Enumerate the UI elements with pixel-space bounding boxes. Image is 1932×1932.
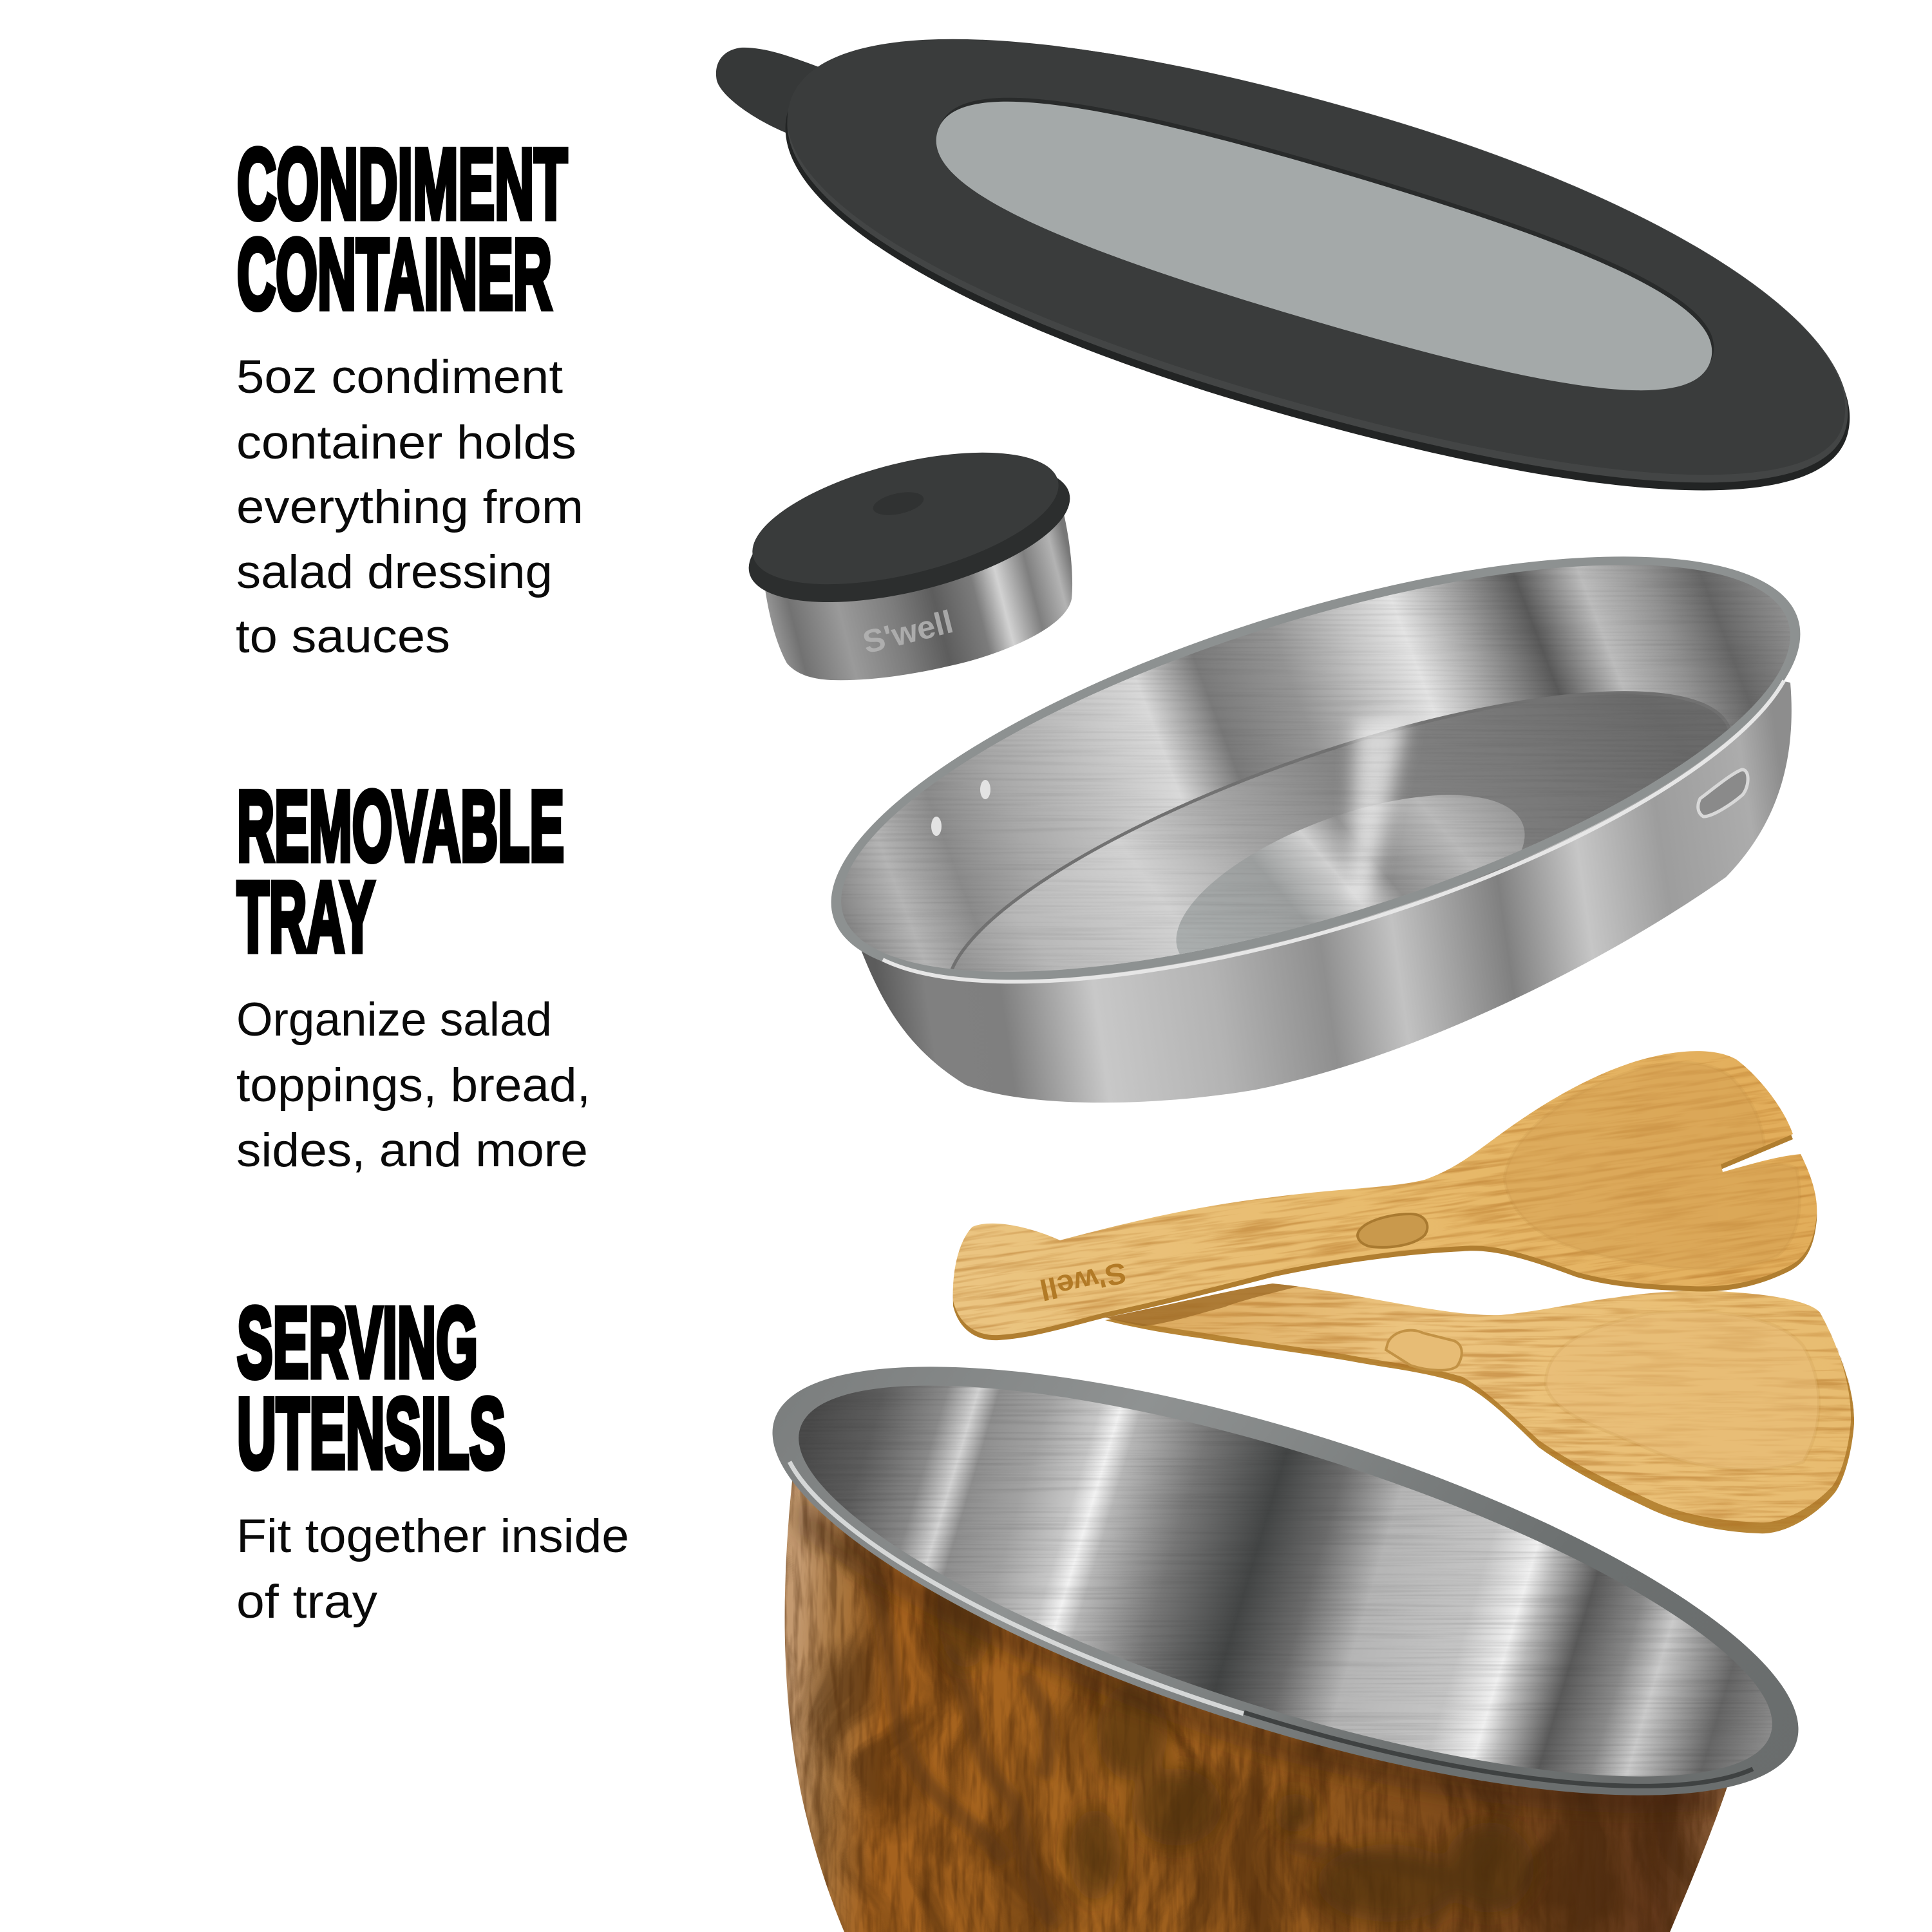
wood base colour [773, 1468, 1739, 1932]
heading: serving utensils: UTENSILS [237, 1378, 506, 1489]
lower spoon [1082, 1240, 1880, 1546]
upper spoon face [953, 1051, 1817, 1335]
container lid side [735, 437, 1083, 629]
lid ridge [748, 0, 1893, 557]
tray outer wall [860, 644, 1792, 1103]
illustration: wood-finish salad bowl [730, 1278, 1841, 1932]
lower spoon detail [1082, 1240, 1880, 1546]
bowl rim dark line [1244, 1618, 1753, 1864]
upper spoon bowl [1504, 1063, 1800, 1269]
lower spoon bowl [1546, 1312, 1819, 1470]
utensil logo: S'well [1037, 1256, 1130, 1307]
body text: condiment container: salad dressing [236, 546, 553, 598]
heading: removable tray: TRAY [237, 861, 375, 972]
body text: serving utensils: of tray [236, 1576, 378, 1628]
upper spoon grain [911, 982, 1846, 1407]
lid top surface [749, 0, 1889, 549]
body text: condiment container: container holds [236, 417, 576, 469]
upper spoon edge [953, 1056, 1817, 1340]
shadow from upper spoon [1095, 1240, 1417, 1327]
wood swirl strokes [869, 1578, 1513, 1926]
tray inner wall [841, 565, 1788, 969]
illustration: removable steel tray [831, 556, 1801, 1103]
heading: condiment container: CONDIMENT [237, 128, 567, 240]
heading: serving utensils [237, 1287, 506, 1489]
lower spoon edge [1105, 1286, 1854, 1533]
bowl rim bright line [759, 1462, 1274, 1714]
body text: condiment container: everything from [236, 481, 583, 533]
lower spoon face [1105, 1283, 1851, 1522]
upper spoon finger slot [1358, 1214, 1427, 1247]
bowl rim [730, 1278, 1841, 1884]
container steel body [764, 509, 1072, 680]
tray interior [841, 565, 1790, 972]
body text: condiment container: to sauces [236, 611, 450, 663]
lid window [916, 60, 1732, 432]
container lid emblem [871, 488, 925, 519]
panel: removable tray text [236, 770, 591, 1177]
tray rim highlight [883, 681, 1815, 1060]
heading: removable tray [237, 770, 564, 972]
wood burl spots [937, 1552, 1534, 1922]
lid tab [716, 48, 837, 133]
panel: serving utensils text [236, 1287, 629, 1628]
body text: condiment container [236, 351, 583, 663]
tray rim [787, 469, 1844, 1068]
heading: condiment container: CONTAINER [237, 218, 552, 330]
body text: removable tray: toppings, bread, [236, 1059, 591, 1112]
panel: condiment container text [236, 128, 583, 663]
brushed steel texture [760, 1378, 1816, 1790]
body text: removable tray [236, 994, 591, 1177]
container logo: S'well [859, 603, 956, 661]
wood fine grain [773, 1468, 1739, 1932]
tray rivets [931, 780, 990, 836]
body text: serving utensils: Fit together inside [236, 1510, 629, 1562]
heading: serving utensils: SERVING [237, 1287, 478, 1398]
tray handle slot [1698, 770, 1748, 817]
illustration: bamboo serving utensils [911, 982, 1880, 1546]
illustration: silicone lid with window [716, 0, 1895, 565]
bowl interior steel [760, 1378, 1816, 1790]
upper spoon [911, 982, 1846, 1407]
tray floor [951, 691, 1730, 972]
body text: removable tray: Organize salad [236, 994, 552, 1046]
bowl wood exterior [773, 1468, 1739, 1932]
lid underside rim [745, 0, 1895, 565]
lower spoon tab [1386, 1331, 1462, 1370]
illustration: condiment container [735, 427, 1083, 680]
body text: condiment container: 5oz condiment [236, 351, 563, 403]
tray centre disk [1176, 795, 1525, 954]
tray floor light streak [1349, 720, 1407, 902]
container lid top [739, 427, 1072, 610]
body text: serving utensils [236, 1510, 629, 1628]
lower spoon grain [1082, 1275, 1880, 1546]
bowl shadow below rim [799, 1494, 1732, 1813]
heading: condiment container [237, 128, 567, 330]
wood grain [773, 1468, 1739, 1932]
upper spoon detail [911, 982, 1846, 1407]
lid window shadow edge [918, 56, 1734, 428]
body text: removable tray: sides, and more [236, 1124, 588, 1177]
tray brushed texture [824, 547, 1810, 998]
heading: removable tray: REMOVABLE [237, 770, 564, 882]
